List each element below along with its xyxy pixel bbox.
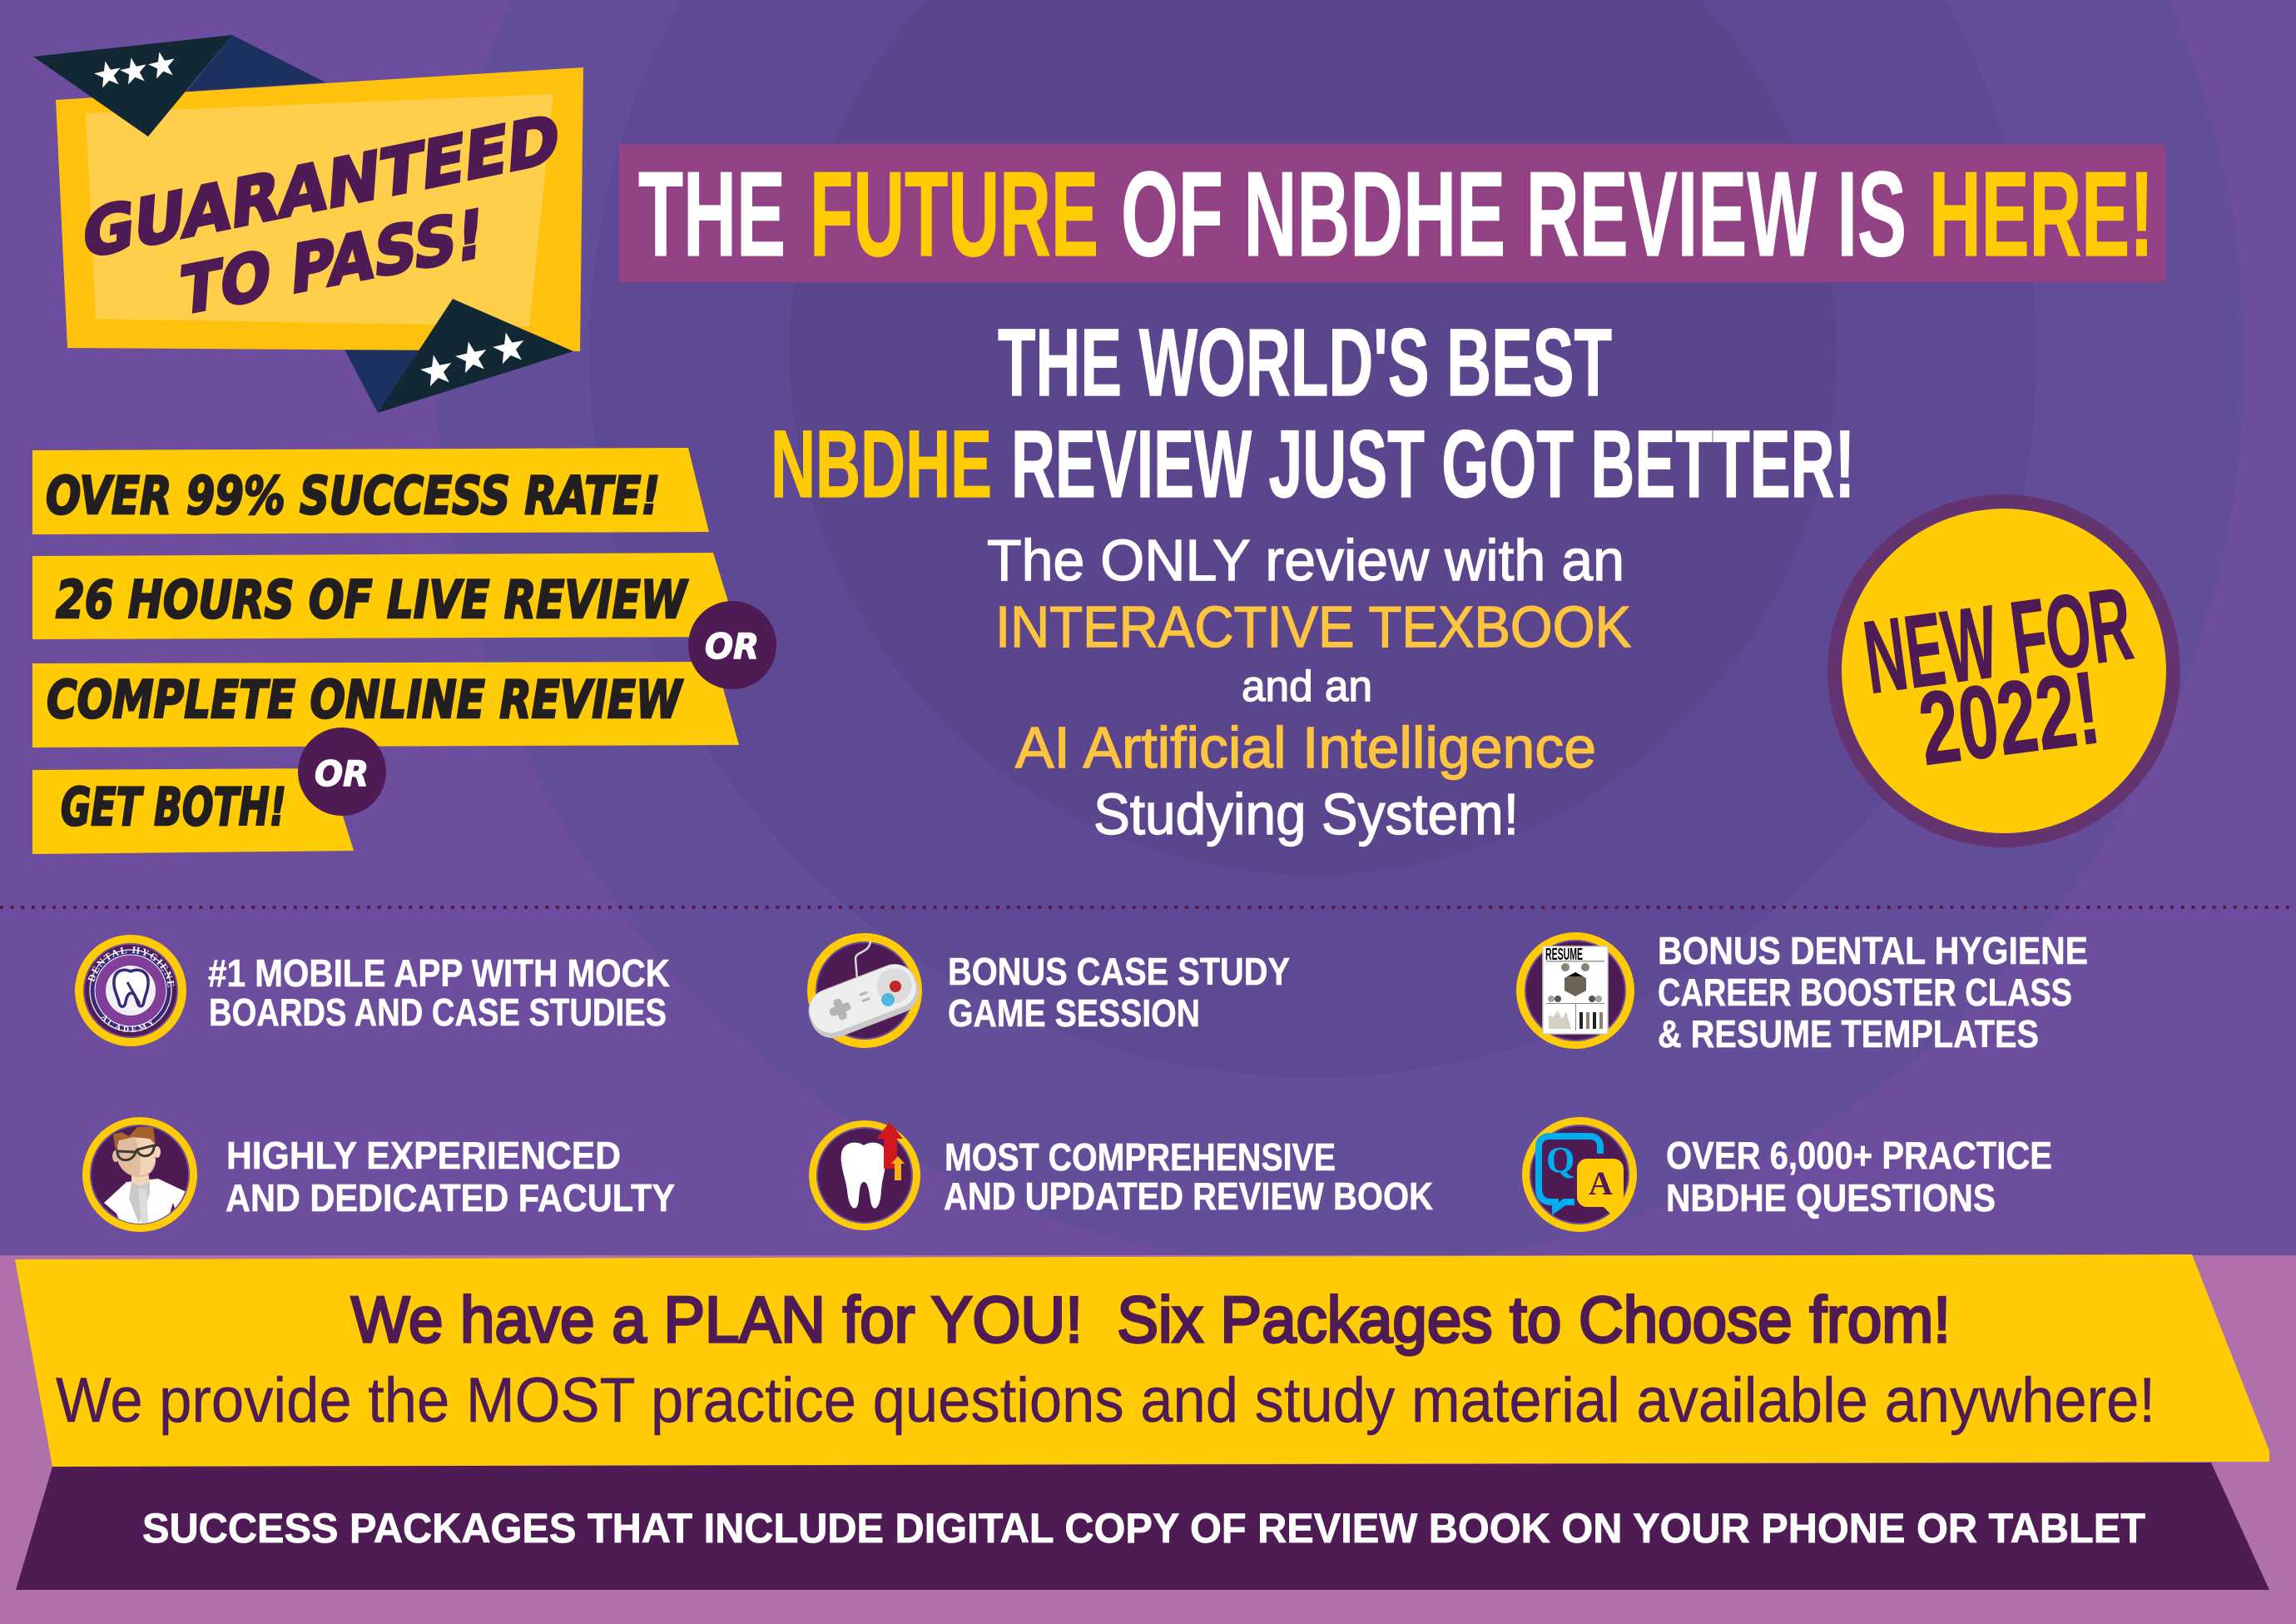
title banner: THE xyxy=(638,147,786,281)
badge: new for 2022: 2022! xyxy=(1913,650,2106,787)
heading: nbdhe review just got better xyxy=(771,411,1855,518)
feature: practice questions: OVER 6,000+ PRACTICE xyxy=(1666,1134,2052,1177)
feature: practice questions xyxy=(1666,1134,2052,1219)
strip: online review xyxy=(32,662,739,747)
feature: review book: MOST COMPREHENSIVE xyxy=(945,1135,1336,1179)
icon: dental hygiene academy seal: DENTAL HYGIENE xyxy=(87,946,175,987)
icon: faculty member xyxy=(82,1117,197,1232)
icon: resume: RESUME xyxy=(1545,946,1583,964)
badge: guaranteed to pass: TO PASS! xyxy=(178,196,486,331)
bottom pink background xyxy=(0,1255,2296,1624)
text: the only review: The ONLY review with an xyxy=(987,528,1624,593)
icon: question and answer bubbles: Q xyxy=(1546,1140,1574,1180)
strip: success rate: OVER 99% SUCCESS RATE! xyxy=(46,465,660,526)
text: interactive textbook: INTERACTIVE TEXBOOK xyxy=(995,594,1631,659)
strip: live review: 26 HOURS OF LIVE REVIEW xyxy=(56,569,688,630)
icon: dental hygiene academy seal: ACADEMY xyxy=(101,1016,154,1032)
icon: game controller xyxy=(802,933,925,1048)
feature: career booster: CAREER BOOSTER CLASS xyxy=(1658,971,2072,1014)
strip: online review: COMPLETE ONLINE REVIEW xyxy=(47,669,683,730)
text: and an: and an xyxy=(1242,663,1372,711)
feature: mobile app: BOARDS AND CASE STUDIES xyxy=(209,991,667,1034)
feature: case study: BONUS CASE STUDY xyxy=(948,950,1290,993)
badge: guaranteed to pass: GUARANTEED xyxy=(81,100,562,275)
feature: faculty: HIGHLY EXPERIENCED xyxy=(226,1134,621,1177)
feature: faculty: AND DEDICATED FACULTY xyxy=(226,1176,675,1219)
badge: new for 2022 xyxy=(1827,494,2180,847)
feature: review book: AND UPDATED REVIEW BOOK xyxy=(944,1175,1433,1218)
or badge two: OR xyxy=(315,753,369,794)
yellow plan banner: We provide the MOST practice questions and study material available anywhere! xyxy=(56,1365,2155,1436)
feature: career booster: BONUS DENTAL HYGIENE xyxy=(1658,929,2088,972)
feature: career booster: & RESUME TEMPLATES xyxy=(1658,1012,2039,1055)
strip: live review xyxy=(32,553,739,639)
feature: mobile app: #1 MOBILE APP WITH MOCK xyxy=(208,951,670,995)
heading: nbdhe review just got better: NBDHE xyxy=(771,411,992,518)
title banner: HERE! xyxy=(1929,147,2154,281)
icon: question and answer bubbles xyxy=(1522,1117,1637,1232)
title banner: FUTURE xyxy=(810,147,1098,281)
feature: practice questions: NBDHE QUESTIONS xyxy=(1666,1176,1996,1219)
strip: get both xyxy=(32,768,354,854)
dark success packages banner xyxy=(16,1463,2269,1590)
background xyxy=(436,0,2244,1255)
or badge one xyxy=(688,601,776,689)
feature: review book xyxy=(944,1135,1433,1218)
dotted divider line xyxy=(0,906,2296,909)
strip: get both: GET BOTH! xyxy=(61,777,286,837)
or badge two xyxy=(298,728,386,816)
title banner xyxy=(619,144,2165,282)
heading: nbdhe review just got better: REVIEW JUST GOT BETTER! xyxy=(1011,411,1855,518)
feature: case study xyxy=(948,950,1290,1035)
icon: tooth with arrows xyxy=(809,1120,920,1230)
yellow plan banner xyxy=(15,1254,2269,1467)
feature: mobile app xyxy=(208,951,670,1034)
text: ai artificial intelligence: AI Artificial Intelligence xyxy=(1015,715,1596,780)
heading: the world's best: THE WORLD'S BEST xyxy=(998,310,1612,416)
strip: success rate xyxy=(32,448,709,534)
feature: case study: GAME SESSION xyxy=(948,991,1200,1035)
feature: faculty xyxy=(226,1134,675,1219)
text: studying system: Studying System! xyxy=(1093,782,1519,847)
or badge one: OR xyxy=(705,626,759,667)
yellow plan banner: We have a PLAN for YOU! Six Packages to Choose from! xyxy=(351,1283,1951,1356)
icon: resume xyxy=(1516,932,1634,1049)
badge: guaranteed to pass xyxy=(33,35,583,413)
icon: dental hygiene academy seal xyxy=(75,935,186,1046)
icon: question and answer bubbles: A xyxy=(1589,1165,1613,1202)
dark success packages banner: SUCCESS PACKAGES THAT INCLUDE DIGITAL COPY OF REVIEW BOOK ON YOUR PHONE OR TABLET xyxy=(142,1505,2145,1552)
feature: career booster xyxy=(1658,929,2088,1055)
